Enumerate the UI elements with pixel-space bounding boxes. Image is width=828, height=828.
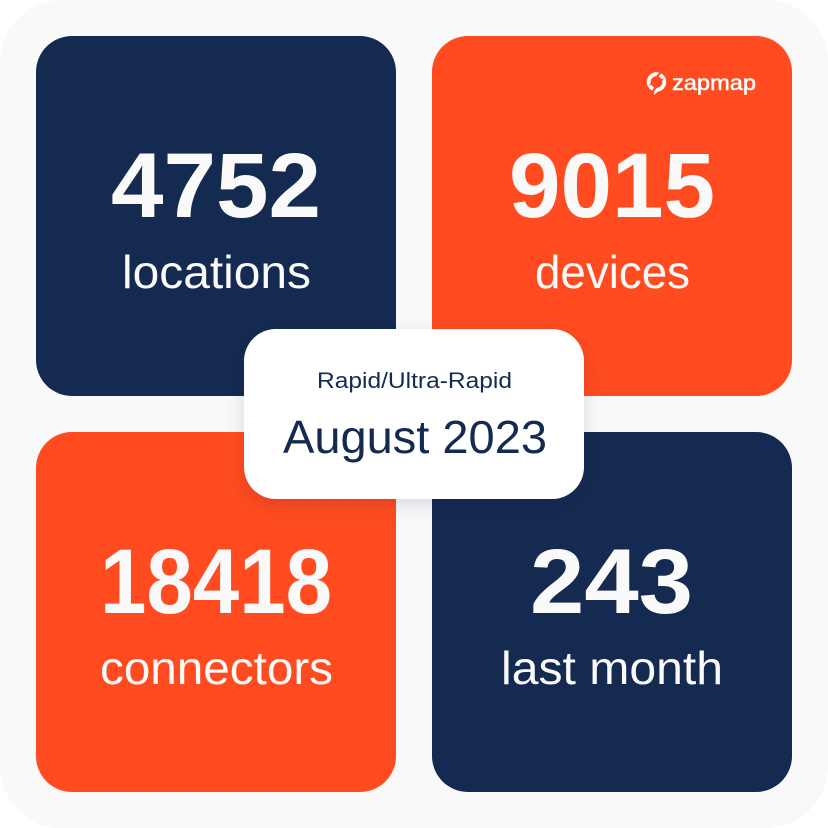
panel: connectors [36, 432, 396, 792]
label: connectors: connectors [100, 642, 333, 694]
label: last month: last month [501, 642, 723, 694]
panel: last month [432, 432, 792, 792]
icon: bolt pin [649, 71, 664, 95]
label: devices: devices [535, 246, 690, 298]
subtitle: Rapid/Ultra-Rapid [317, 368, 512, 393]
number: 4752: 4752 [111, 135, 321, 237]
number: 243: 243 [530, 531, 693, 633]
centre date card [244, 329, 584, 499]
wordmark: zapmap [672, 71, 756, 95]
number: 9015: 9015 [509, 135, 715, 237]
label: locations: locations [122, 246, 311, 298]
panel: devices [432, 36, 792, 396]
number: 18418: 18418 [100, 531, 332, 633]
panel: locations [36, 36, 396, 396]
date: August 2023 [283, 411, 547, 463]
logo: zapmap [649, 71, 756, 95]
